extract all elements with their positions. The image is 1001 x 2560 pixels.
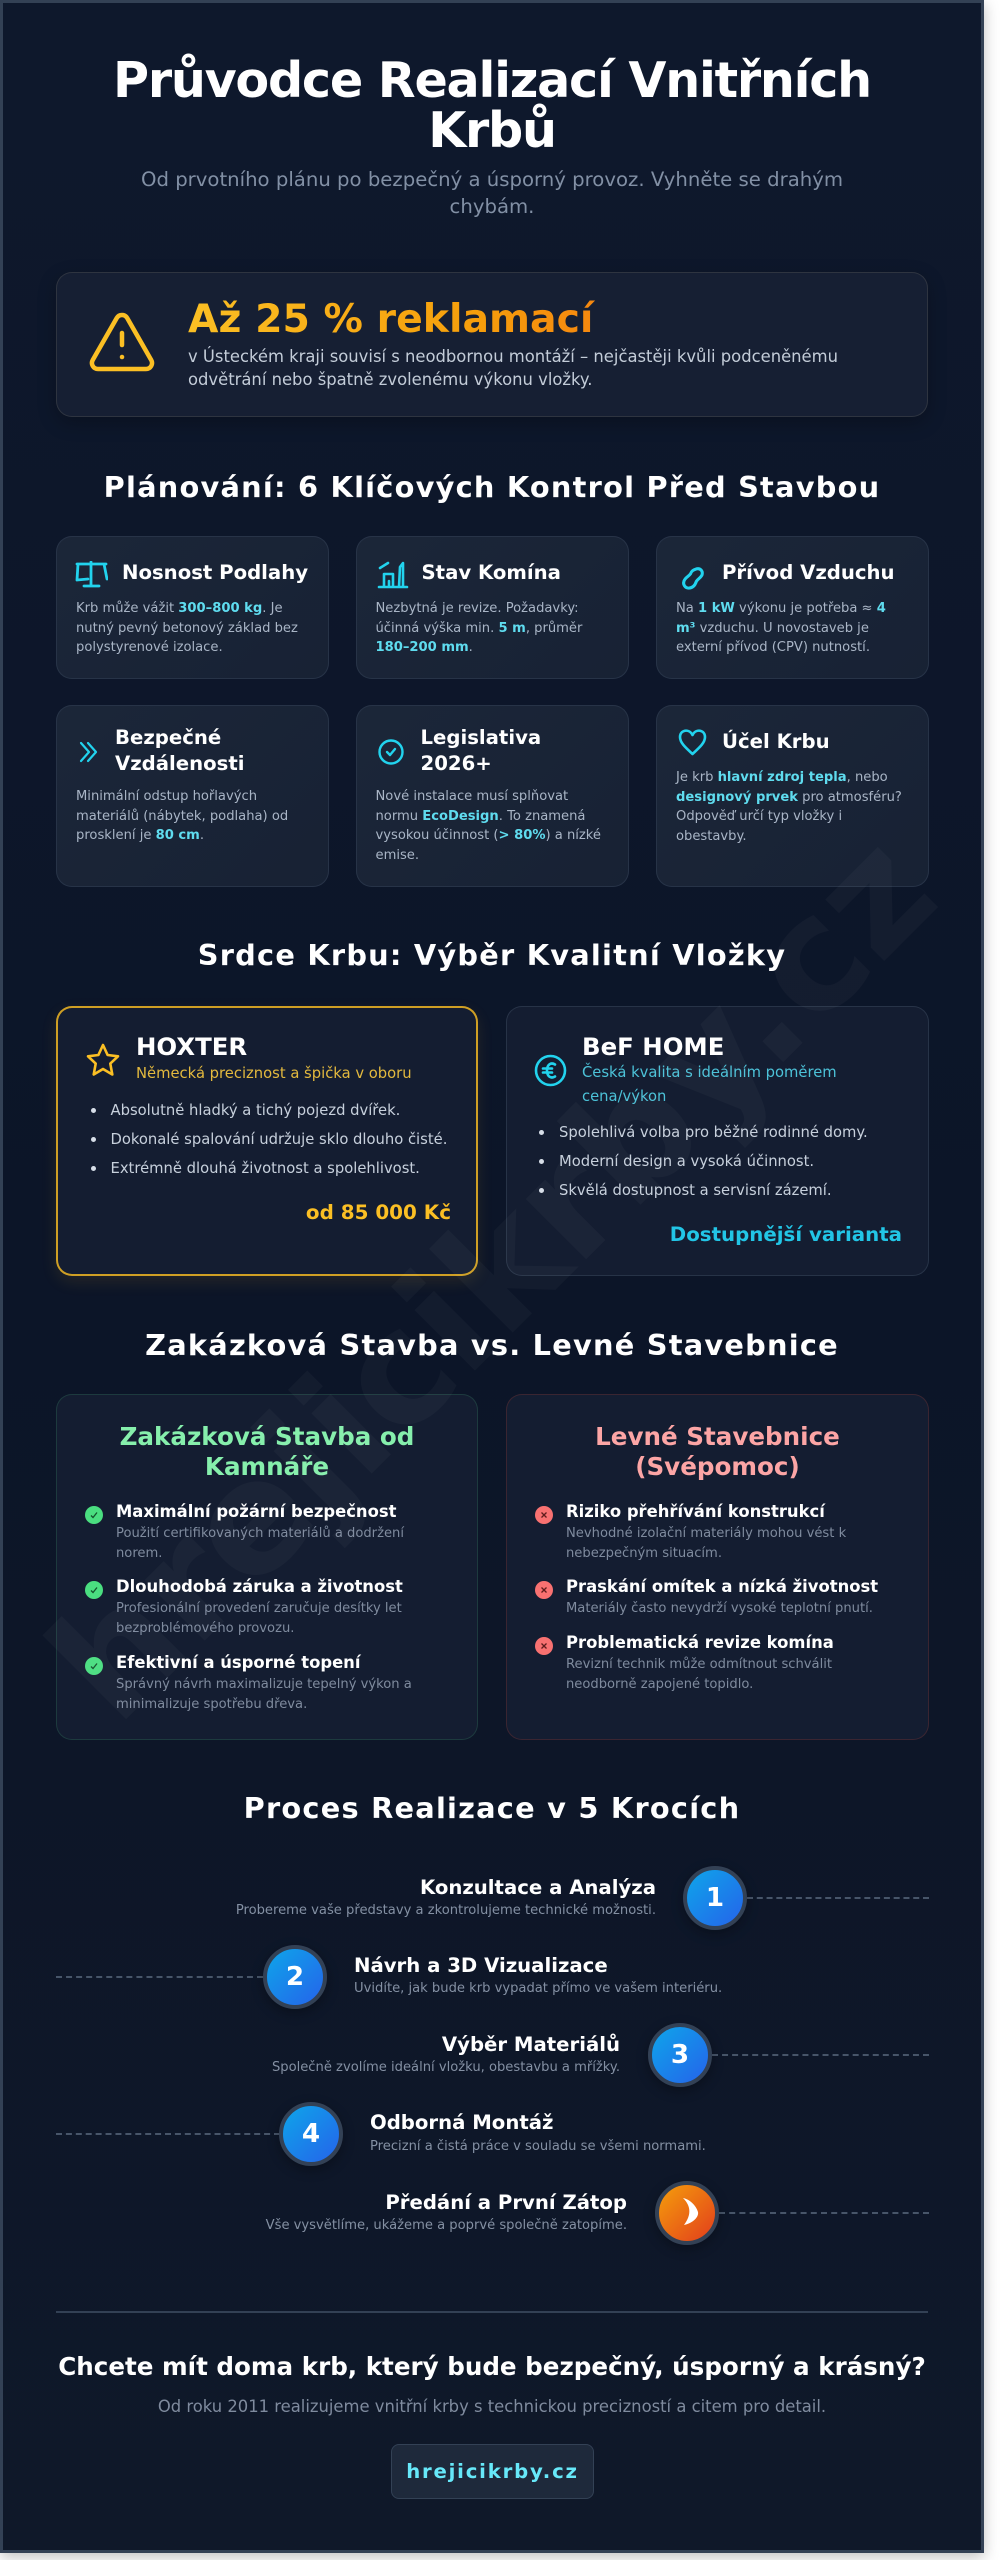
panel heading: Kamnáře — [205, 1452, 329, 1480]
panel: chimney — [356, 536, 628, 679]
warning text — [188, 346, 838, 389]
item title: Praskání omítek a nízká životnost — [566, 1577, 878, 1596]
item text: Použití certifikovaných materiálů a dodržení — [116, 1526, 404, 1541]
panel: custom build — [56, 1394, 478, 1740]
panel: HOXTER — [56, 1006, 478, 1276]
card text: materiálů (nábytek, podlaha) od — [76, 809, 288, 824]
panel: safe distances — [56, 705, 329, 887]
card text: emise. — [376, 848, 419, 863]
product tagline: Německá preciznost a špička v oboru — [136, 1065, 412, 1082]
heading: inserts: Srdce Krbu: Výběr Kvalitní Vložky — [198, 938, 786, 972]
icon: euro — [534, 1054, 566, 1086]
step 3 — [0, 2023, 984, 2087]
icon: chimney — [378, 562, 408, 588]
step title: Výběr Materiálů — [442, 2033, 620, 2056]
step number — [263, 1945, 327, 2009]
footer text: Od roku 2011 realizujeme vnitřní krby s technickou precizností a citem pro detail. — [158, 2397, 826, 2416]
product tagline: Česká kvalita s ideálním poměrem — [582, 1064, 837, 1081]
warning text: v Ústeckém kraji souvisí s neodbornou montáží – nejčastěji kvůli podceněnému — [188, 347, 838, 366]
item text: norem. — [116, 1546, 162, 1561]
warning heading: Až 25 % reklamací — [188, 296, 593, 342]
subtitle: chybám. — [450, 195, 534, 218]
bullet list: Absolutně hladký a tichý pojezd dvířek. — [110, 1102, 400, 1119]
bullet list — [91, 1102, 447, 1177]
item text: Revizní technik může odmítnout schválit — [566, 1657, 832, 1672]
step number: flame — [655, 2181, 719, 2245]
item text: neodborně zapojené topidlo. — [566, 1677, 753, 1692]
item: warranty — [85, 1577, 403, 1636]
step 4 — [0, 2102, 984, 2166]
card text: nutný pevný betonový základ bez — [76, 621, 298, 636]
icon: check — [85, 1581, 103, 1599]
product name: HOXTER — [136, 1032, 247, 1061]
card heading: Legislativa — [420, 726, 541, 749]
step number — [279, 2102, 343, 2166]
panel: floor load — [56, 536, 329, 679]
bullet list: Spolehlivá volba pro běžné rodinné domy. — [559, 1124, 868, 1141]
card text: Nové instalace musí splňovat — [376, 789, 568, 804]
item text — [116, 1601, 402, 1636]
icon: double chevron — [80, 742, 98, 762]
icon: star — [86, 1044, 120, 1076]
icon: scales — [76, 561, 108, 588]
card heading — [115, 726, 244, 775]
card text: Je krb hlavní zdroj tepla, nebo — [676, 770, 888, 785]
icon: cross — [535, 1637, 553, 1655]
step number — [683, 1866, 747, 1930]
icon: warning triangle — [90, 312, 154, 372]
item title: Dlouhodobá záruka a životnost — [116, 1577, 403, 1596]
card text — [675, 770, 902, 844]
item: cracking — [535, 1577, 878, 1616]
item text: Nevhodné izolační materiály mohou vést k — [566, 1526, 846, 1541]
footer heading: Chcete mít doma krb, který bude bezpečný, úsporný a krásný? — [58, 2352, 926, 2381]
panel heading: (Svépomoc) — [635, 1452, 800, 1480]
item: inspection — [535, 1633, 834, 1692]
card text — [676, 601, 886, 655]
card heading: Účel Krbu — [722, 730, 830, 753]
panel: BeF HOME — [506, 1006, 929, 1276]
website button: hrejicikrby.cz — [406, 2460, 579, 2483]
website button — [391, 2444, 594, 2499]
icon: cross — [535, 1506, 553, 1524]
icon: heart — [678, 729, 706, 756]
product tagline: cena/výkon — [582, 1088, 666, 1105]
item title: Maximální požární bezpečnost — [116, 1502, 396, 1521]
panel: air supply — [656, 536, 929, 679]
icon: flame — [655, 2181, 719, 2245]
card text: obestavby. — [676, 829, 747, 844]
subtitle — [141, 168, 843, 218]
step number: 1 — [706, 1883, 724, 1913]
step number: 3 — [671, 2040, 689, 2070]
step 2 — [0, 1945, 984, 2009]
item title: Efektivní a úsporné topení — [116, 1653, 360, 1672]
item text: nebezpečným situacím. — [566, 1546, 722, 1561]
card text: Odpověď určí typ vložky i — [676, 809, 842, 824]
card heading: Bezpečné — [115, 726, 221, 749]
step 1 — [0, 1866, 984, 1930]
card text: normu EcoDesign. To znamená — [376, 809, 585, 824]
panel heading — [120, 1422, 414, 1480]
card text: Krb může vážit 300–800 kg. Je — [76, 601, 283, 616]
panel: warning callout — [56, 272, 928, 417]
card text: Nezbytná je revize. Požadavky: — [376, 601, 579, 616]
card text — [376, 789, 601, 863]
item text — [566, 1526, 846, 1561]
card text: polystyrenové izolace. — [76, 640, 223, 655]
card text: 180–200 mm. — [376, 640, 473, 655]
item text: Správný návrh maximalizuje tepelný výkon a — [116, 1677, 412, 1692]
step title: Konzultace a Analýza — [420, 1876, 656, 1899]
card heading: Vzdálenosti — [115, 752, 244, 775]
card text: vysokou účinnost (> 80%) a nízké — [376, 828, 601, 843]
icon: air link — [682, 567, 704, 590]
title: Průvodce Realizací Vnitřních — [113, 51, 871, 109]
step text: Vše vysvětlíme, ukážeme a poprvé společně zatopíme. — [266, 2218, 627, 2233]
step number — [648, 2023, 712, 2087]
card text: Minimální odstup hořlavých — [76, 789, 257, 804]
footer divider — [56, 2311, 928, 2313]
card text: účinná výška min. 5 m, průměr — [376, 621, 582, 636]
bullet list: Dokonalé spalování udržuje sklo dlouho čisté. — [110, 1131, 447, 1148]
step text: Precizní a čistá práce v souladu se všemi normami. — [370, 2139, 706, 2154]
card text: externí přívod (CPV) nutností. — [676, 640, 870, 655]
item title: Problematická revize komína — [566, 1633, 834, 1652]
heading: process: Proces Realizace v 5 Krocích — [244, 1791, 740, 1825]
panel: legislation — [356, 705, 628, 887]
panel heading — [595, 1422, 840, 1480]
panel: cheap kits — [506, 1394, 929, 1740]
icon: check — [85, 1657, 103, 1675]
panel: purpose — [656, 705, 929, 887]
item text: minimalizuje spotřebu dřeva. — [116, 1697, 307, 1712]
item text — [116, 1526, 404, 1561]
card heading — [420, 726, 541, 775]
card text: designový prvek pro atmosféru? — [676, 790, 902, 805]
icon: check — [85, 1506, 103, 1524]
step 5 — [0, 2181, 984, 2245]
title: Krbů — [428, 101, 556, 159]
heading: comparison: Zakázková Stavba vs. Levné Stavebnice — [145, 1328, 839, 1362]
panel heading: Levné Stavebnice — [595, 1422, 840, 1451]
item text — [116, 1677, 412, 1712]
step title: Návrh a 3D Vizualizace — [354, 1954, 608, 1977]
card heading: Stav Komína — [422, 561, 561, 584]
panel heading: Zakázková Stavba od — [120, 1422, 414, 1451]
card text: m³ vzduchu. U novostaveb je — [676, 621, 869, 636]
item: fire safety — [85, 1502, 404, 1561]
product tagline — [582, 1062, 837, 1105]
card text: prosklení je 80 cm. — [76, 828, 204, 843]
subtitle: Od prvotního plánu po bezpečný a úsporný provoz. Vyhněte se drahým — [141, 168, 843, 191]
item title: Riziko přehřívání konstrukcí — [566, 1502, 825, 1521]
bullet list — [539, 1124, 868, 1199]
bullet list: Moderní design a vysoká účinnost. — [559, 1153, 814, 1170]
card heading: Přívod Vzduchu — [722, 561, 895, 584]
step text: Probereme vaše představy a zkontrolujeme technické možnosti. — [236, 1903, 656, 1918]
title — [113, 51, 871, 159]
card heading: 2026+ — [420, 752, 492, 775]
item text: Profesionální provedení zaručuje desítky let — [116, 1601, 402, 1616]
heading: planning: Plánování: 6 Klíčových Kontrol Před Stavbou — [104, 470, 880, 504]
item: efficiency — [85, 1653, 412, 1712]
item text: bezproblémového provozu. — [116, 1621, 294, 1636]
card text — [76, 600, 298, 655]
icon: check circle — [378, 739, 404, 765]
step number: 2 — [286, 1962, 304, 1992]
card text — [76, 789, 288, 843]
warning text: odvětrání nebo špatně zvolenému výkonu vložky. — [188, 370, 592, 389]
price: od 85 000 Kč — [306, 1201, 451, 1224]
step title: Odborná Montáž — [370, 2111, 553, 2134]
icon: cross — [535, 1581, 553, 1599]
price note: Dostupnější varianta — [670, 1223, 902, 1246]
item text: Materiály často nevydrží vysoké teplotní pnutí. — [566, 1601, 873, 1616]
bullet list: Skvělá dostupnost a servisní zázemí. — [559, 1182, 832, 1199]
card text: Na 1 kW výkonu je potřeba ≈ 4 — [676, 601, 886, 616]
card heading: Nosnost Podlahy — [122, 561, 308, 584]
watermark: hrejicikrby.cz — [14, 799, 970, 1755]
step title: Předání a První Zátop — [385, 2191, 627, 2214]
item text — [566, 1655, 832, 1694]
step text: Uvidíte, jak bude krb vypadat přímo ve vašem interiéru. — [354, 1981, 722, 1996]
bullet list: Extrémně dlouhá životnost a spolehlivost. — [110, 1160, 420, 1177]
step number: 4 — [302, 2119, 320, 2149]
item: overheating — [535, 1502, 846, 1561]
product name: BeF HOME — [582, 1032, 724, 1061]
card text — [376, 601, 582, 655]
step text: Společně zvolíme ideální vložku, obestavbu a mřížky. — [272, 2060, 620, 2075]
